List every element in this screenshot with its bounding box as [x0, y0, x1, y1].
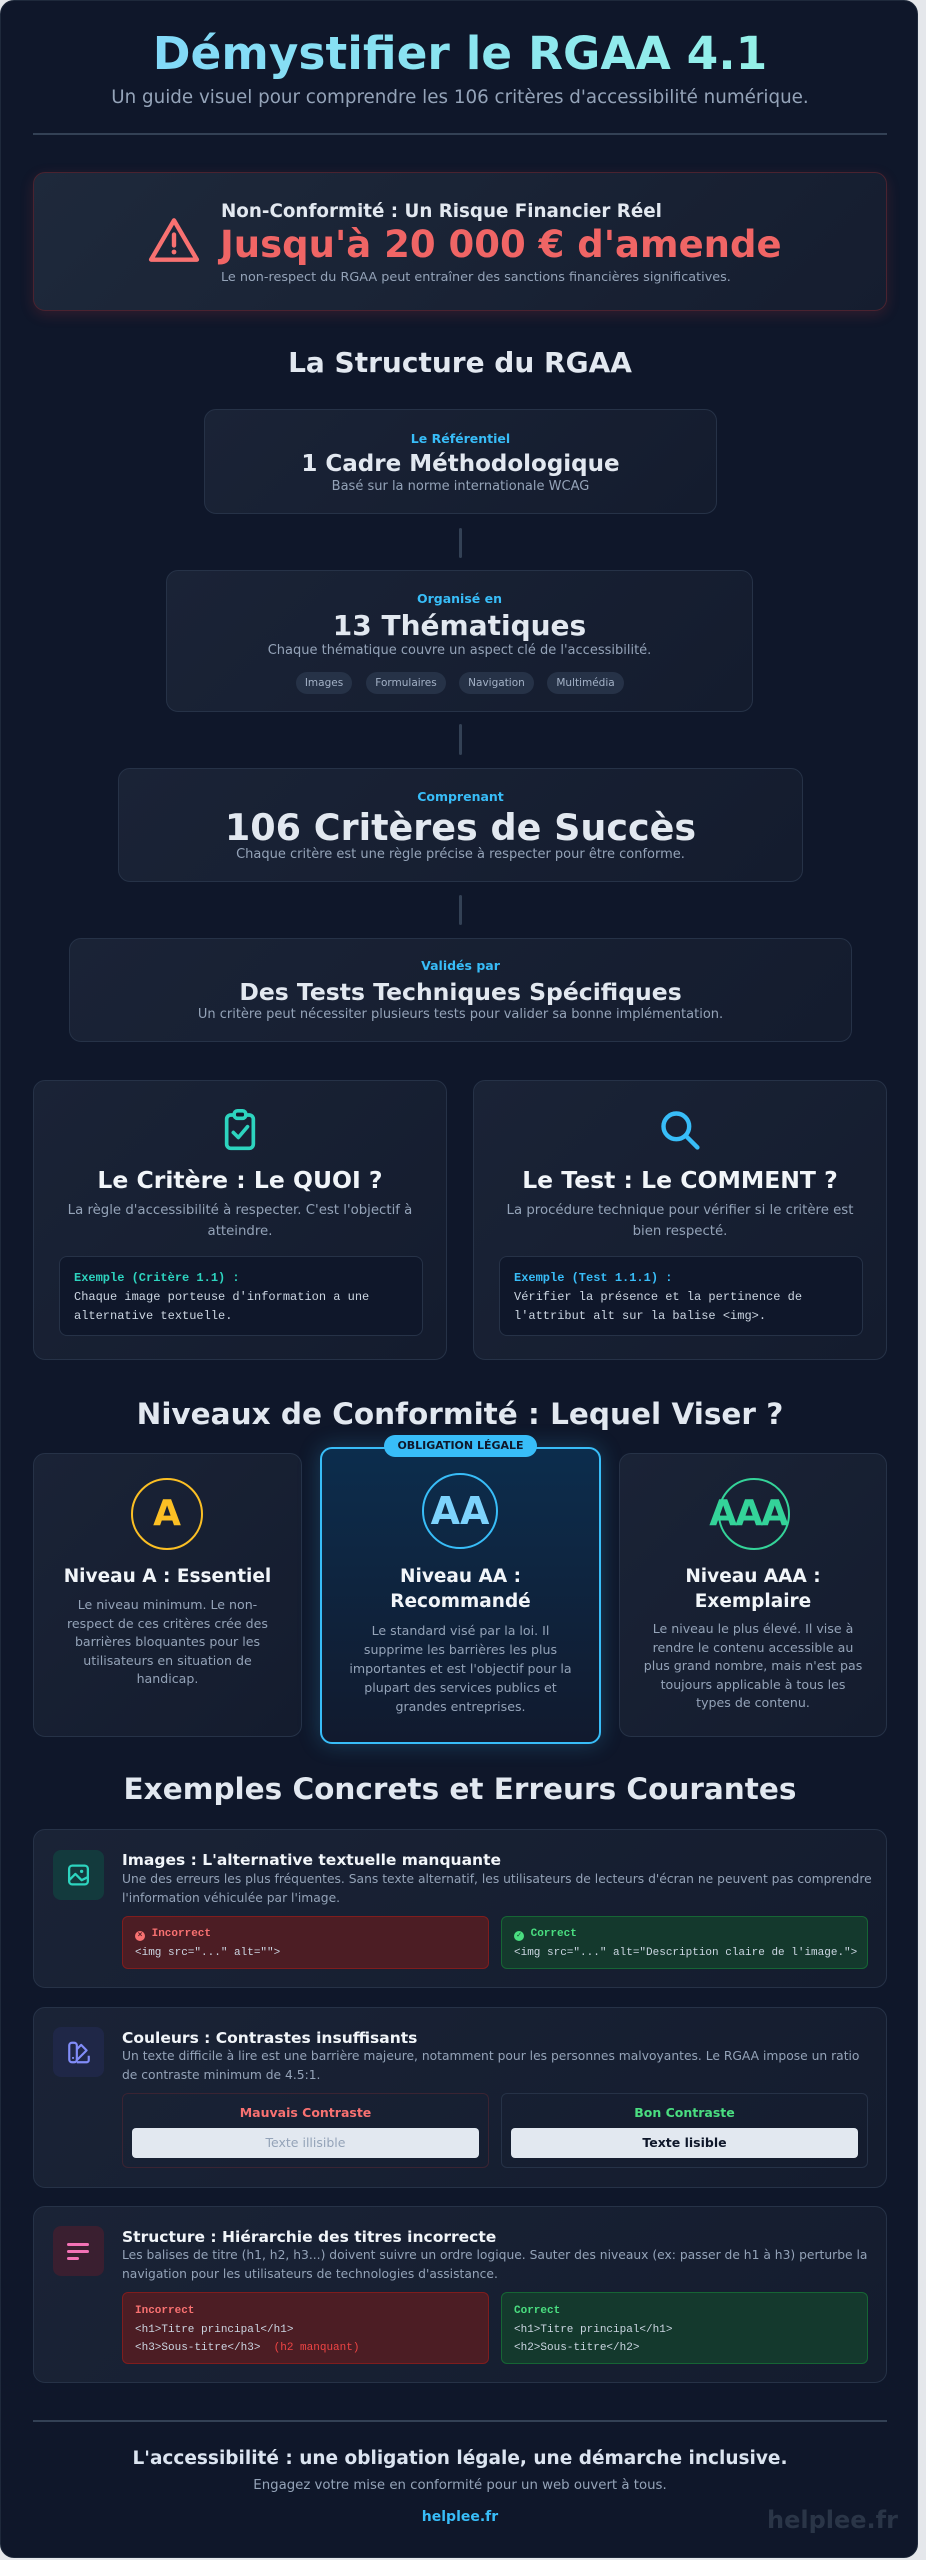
- panel: critere: Le Critère : Le QUOI ?: [97, 1166, 383, 1194]
- panel: structure example: <h3>Sous-titre</h3> (h2 manquant): [135, 2342, 359, 2354]
- panel: structure example: Correct: [514, 2305, 560, 2317]
- panel: couleurs example: Couleurs : Contrastes insuffisants: [122, 2029, 417, 2047]
- panel: niveau AAA: Le niveau le plus élevé. Il vise à rendre le contenu accessible au plus grand nombre, mais n'est pas toujours applicable à tous les types de contenu.: [644, 1621, 862, 1710]
- panel: couleurs example: [33, 2007, 887, 2188]
- panel: niveau AA: Niveau AA :: [400, 1566, 521, 1587]
- panel: niveau A: Le niveau minimum. Le non-respect de ces critères crée des barrières bloquantes pour les utilisateurs en situation de handicap.: [67, 1597, 268, 1686]
- panel: test: La procédure technique pour vérifier si le critère est bien respecté.: [507, 1203, 853, 1239]
- title: Démystifier le RGAA 4.1: [153, 27, 767, 80]
- alert note: Le non-respect du RGAA peut entraîner des sanctions financières significatives.: [221, 270, 731, 285]
- panel: images example: Correct: [531, 1928, 577, 1940]
- box: tests: Validés par: [421, 958, 500, 973]
- pills: Multimédia: [556, 677, 615, 689]
- box: criteres: [118, 768, 803, 882]
- panel: niveau A: A: [153, 1493, 181, 1534]
- panel: niveau AAA: AAA: [709, 1493, 787, 1534]
- box: tests: [69, 938, 852, 1042]
- watermark: helplee.fr: [767, 2506, 898, 2534]
- box: tests: Des Tests Techniques Spécifiques: [239, 978, 682, 1006]
- box: criteres: 106 Critères de Succès: [225, 806, 696, 849]
- panel: niveau AA: [320, 1447, 601, 1744]
- panel: critere: Exemple (Critère 1.1) :: [74, 1271, 240, 1285]
- panel: images example: Incorrect: [152, 1928, 211, 1940]
- icon: clipboard: [224, 1109, 256, 1150]
- panel: niveau AAA: Exemplaire: [695, 1591, 811, 1612]
- panel: critere: Chaque image porteuse d'information a une alternative textuelle.: [74, 1290, 369, 1323]
- panel: images example: ×: [138, 1931, 142, 1940]
- box: tests: Un critère peut nécessiter plusieurs tests pour valider sa bonne implémentation.: [198, 1007, 723, 1022]
- icon: magnifier: [661, 1111, 700, 1150]
- footer heading: L'accessibilité : une obligation légale, une démarche inclusive.: [132, 2448, 788, 2469]
- panel: structure example: Incorrect: [135, 2305, 194, 2317]
- box: thematiques: 13 Thématiques: [333, 609, 586, 642]
- panel: images example: [33, 1829, 887, 1988]
- pills: Navigation: [468, 677, 525, 689]
- badge: obligation legale: OBLIGATION LÉGALE: [397, 1439, 524, 1452]
- panel: couleurs example: Bon Contraste: [634, 2105, 735, 2120]
- box: referentiel: 1 Cadre Méthodologique: [301, 451, 620, 477]
- panel: niveau AAA: [619, 1453, 887, 1737]
- heading: exemples: Exemples Concrets et Erreurs Courantes: [124, 1772, 796, 1806]
- panel: critere: [33, 1080, 447, 1360]
- panel: test: Vérifier la présence et la pertinence de l'attribut alt sur la balise <img>.: [514, 1290, 802, 1323]
- panel: niveau AAA: Niveau AAA :: [685, 1566, 821, 1587]
- badge: obligation legale: [384, 1435, 537, 1457]
- footer link: helplee.fr: [422, 2509, 498, 2525]
- icon: warning: [148, 218, 200, 262]
- box: thematiques: Organisé en: [417, 591, 502, 606]
- box: criteres: Comprenant: [417, 789, 504, 804]
- alert heading: Non-Conformité : Un Risque Financier Réel: [221, 201, 662, 222]
- panel: niveau AA: Le standard visé par la loi. Il supprime les barrières les plus importantes et est l'objectif pour la plupart des services publics et grandes entreprises.: [349, 1623, 572, 1714]
- pills: Images: [305, 677, 343, 689]
- panel: images example: Une des erreurs les plus fréquentes. Sans texte alternatif, les utilisateurs de lecteurs d'écran ne peuvent pas comprendre l'information véhiculée par l'image.: [122, 1872, 872, 1905]
- pills: [296, 672, 624, 694]
- panel: couleurs example: Texte illisible: [266, 2135, 345, 2150]
- box: referentiel: Le Référentiel: [411, 431, 510, 446]
- box: criteres: Chaque critère est une règle précise à respecter pour être conforme.: [236, 847, 685, 862]
- heading: niveaux: Niveaux de Conformité : Lequel Viser ?: [137, 1397, 783, 1431]
- box: thematiques: Chaque thématique couvre un aspect clé de l'accessibilité.: [268, 643, 651, 658]
- icon: palette: [53, 2027, 104, 2077]
- panel: test: [473, 1080, 887, 1360]
- panel: niveau AA: Recommandé: [390, 1591, 531, 1612]
- panel: test: Le Test : Le COMMENT ?: [522, 1166, 838, 1194]
- panel: test: Exemple (Test 1.1.1) :: [514, 1271, 672, 1285]
- panel: structure example: Structure : Hiérarchie des titres incorrecte: [122, 2228, 496, 2246]
- panel: images example: ✓: [517, 1931, 521, 1940]
- box: thematiques: [166, 570, 753, 712]
- panel: images example: Images : L'alternative textuelle manquante: [122, 1851, 501, 1869]
- icon: lines: [53, 2226, 104, 2276]
- panel: images example: <img src="..." alt="Description claire de l'image.">: [514, 1947, 857, 1959]
- panel: images example: <img src="..." alt="">: [135, 1947, 280, 1959]
- panel: structure example: [33, 2206, 887, 2383]
- panel: couleurs example: Un texte difficile à lire est une barrière majeure, notamment pour les personnes malvoyantes. Le RGAA impose un ratio de contraste minimum de 4.5:1.: [122, 2049, 859, 2082]
- subtitle: Un guide visuel pour comprendre les 106 critères d'accessibilité numérique.: [111, 87, 809, 108]
- panel: niveau A: [33, 1453, 302, 1737]
- panel: niveau A: Niveau A : Essentiel: [64, 1566, 271, 1587]
- panel: critere: La règle d'accessibilité à respecter. C'est l'objectif à atteindre.: [68, 1203, 412, 1239]
- box: referentiel: Basé sur la norme internationale WCAG: [332, 479, 589, 494]
- title: [1, 26, 919, 82]
- panel: structure example: <h1>Titre principal</h1>: [514, 2324, 672, 2336]
- icon: image: [53, 1850, 104, 1900]
- panel: structure example: <h1>Titre principal</h1>: [135, 2324, 293, 2336]
- box: referentiel: [204, 409, 717, 514]
- panel: structure example: Les balises de titre (h1, h2, h3...) doivent suivre un ordre logique. Sauter des niveaux (ex: passer de h1 à h3) perturbe la navigation pour les utilisateurs de technologies d'assistance.: [122, 2248, 867, 2281]
- panel: structure example: <h2>Sous-titre</h2>: [514, 2342, 639, 2354]
- heading: structure: La Structure du RGAA: [288, 346, 632, 379]
- pills: Formulaires: [375, 677, 437, 689]
- alert amount: Jusqu'à 20 000 € d'amende: [220, 223, 782, 266]
- footer sub: Engagez votre mise en conformité pour un web ouvert à tous.: [253, 2478, 667, 2493]
- panel: couleurs example: Mauvais Contraste: [240, 2105, 371, 2120]
- panel: couleurs example: Texte lisible: [642, 2135, 727, 2150]
- panel: niveau AA: AA: [431, 1489, 489, 1533]
- alert panel: fine: [33, 172, 887, 311]
